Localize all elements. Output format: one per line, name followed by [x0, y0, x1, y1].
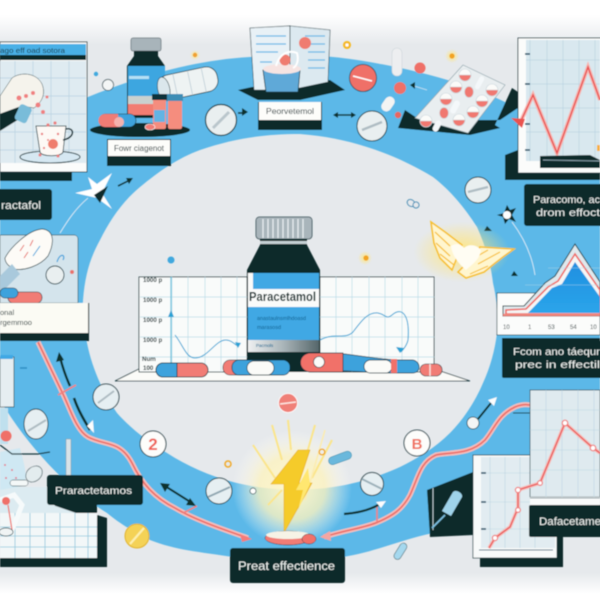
- label: paracomo drom effoct: drom effoct: [536, 207, 600, 219]
- icon: small tablet with arrow: [467, 397, 497, 429]
- pills falling: [16, 91, 48, 114]
- label: ional rgemmoo: onal: [0, 308, 15, 317]
- panel: central bottle display: [115, 217, 470, 381]
- panel: left blister thumbnail: [0, 229, 78, 303]
- tablet: [46, 266, 64, 284]
- icon: small rings and pills: [225, 449, 408, 561]
- label: fowr ciagenot: [107, 139, 171, 166]
- x-axis labels: 10: [590, 325, 597, 331]
- icon: winged heart: [414, 222, 514, 282]
- icon: pill bottle: [127, 38, 165, 118]
- arrow: left downward arrow: [74, 398, 94, 433]
- bottle small print: anastaulnsmlhdoasd: [257, 316, 306, 322]
- step badge: 2: [140, 431, 166, 457]
- label: fcom ano taequr: [502, 341, 600, 378]
- pour tube: [0, 264, 20, 290]
- icon: lightning burst: [232, 420, 352, 546]
- panel shadow: [0, 172, 72, 181]
- table top: [0, 487, 76, 513]
- step badge: B: B: [412, 436, 423, 453]
- panel: blister pack: [398, 65, 530, 135]
- panel background: [0, 235, 78, 303]
- shadow frame: [0, 505, 107, 567]
- chart: bottom-right stacked line charts: [473, 390, 600, 567]
- arrow: lower double arrow: [160, 483, 196, 506]
- red line: [520, 67, 600, 153]
- icon: main bottle: [247, 217, 320, 372]
- ground shadow: [90, 123, 190, 137]
- icon: coral base disc: [265, 531, 316, 545]
- icon: white spark with trail: [60, 173, 112, 233]
- label: preat effectience: Preat effectience: [238, 561, 335, 573]
- capsule: blue coral left: [156, 363, 208, 377]
- short dark dash: [513, 412, 530, 414]
- icon: tea cup with saucer: [20, 151, 80, 163]
- label: fcom ano taequr: prec in effectil: [515, 360, 600, 371]
- icon: right tablet: [465, 177, 491, 203]
- icon: main bottle: Pacmols: [256, 343, 274, 348]
- icon: tablets on left arc: [24, 384, 232, 548]
- arrow: spark to bottle: [118, 178, 133, 186]
- book pages: [250, 26, 290, 90]
- x-axis labels: 53: [548, 325, 555, 331]
- platform: [115, 369, 470, 381]
- icon: capsule: [98, 114, 136, 127]
- icon: coral top tablet: [278, 394, 298, 412]
- bowl: [263, 70, 300, 92]
- pole: [66, 439, 71, 479]
- shadow: [505, 150, 600, 180]
- y axis labels: 1000 p: [143, 297, 162, 304]
- rays: [253, 420, 332, 505]
- label: fowr ciagenot: Fowr ciagenot: [114, 144, 165, 153]
- grid table: [0, 513, 97, 558]
- chart: right mountain chart: [497, 244, 600, 346]
- y axis labels: 1000 p: [143, 317, 162, 324]
- label: praractetamos: Praractetamos: [55, 485, 132, 497]
- chart paper: [0, 42, 87, 172]
- icon: pen on dark card: [427, 472, 473, 537]
- shadow: [398, 88, 530, 135]
- panel: open book with bowl: [238, 26, 345, 100]
- icon: second tablet with double arrow: [333, 111, 387, 141]
- arrow: left upward arrow: [56, 352, 70, 386]
- label: ional rgemmoo: rgemmoo: [0, 318, 32, 327]
- label: ional rgemmoo: [0, 303, 89, 341]
- label: paracomo drom effoct: Paracomo, ac: [533, 194, 600, 206]
- x-axis labels: 10: [503, 325, 510, 331]
- shadow: [238, 80, 345, 100]
- mountain outline: [503, 244, 600, 316]
- y axis labels: 1000 p: [143, 337, 162, 344]
- front chart: [530, 390, 600, 505]
- bottle title: Paracetamol: [249, 289, 316, 304]
- panel header: [0, 44, 86, 55]
- red marker: [511, 118, 525, 128]
- chart: right small chart: [320, 277, 434, 372]
- icon: small gold dots: [94, 41, 459, 265]
- icon: pouring bottle: [0, 104, 24, 131]
- panel: top-left dose chart: ago eff oad sotora: [0, 46, 66, 55]
- label: peorvetemol: Peorvetemol: [266, 107, 314, 116]
- capsules: [8, 292, 42, 303]
- icon: small vials: [152, 94, 183, 129]
- label: peorvetemol: [258, 102, 322, 130]
- legs: [0, 495, 22, 535]
- blue curve: [320, 312, 408, 352]
- blue curve: [175, 335, 238, 358]
- label: paracomo drom effoct: [524, 184, 600, 226]
- label: dafacetame: Dafacetame: [539, 516, 600, 528]
- panel: top-left dose chart: [0, 42, 87, 181]
- capsule: large right: [300, 353, 419, 373]
- red line: [489, 423, 600, 548]
- label: fcom ano taequr: Fcom ano táequr: [513, 347, 600, 358]
- panel: medicine bottle group: [90, 38, 220, 137]
- label: ractafol: [0, 189, 52, 220]
- icon: bottom tablet with arrow: [344, 472, 386, 514]
- icon: pills and dots cluster: [379, 48, 427, 118]
- coral ball: [280, 54, 290, 66]
- small upper chart: [0, 357, 14, 407]
- flow line: right coral path: [320, 405, 534, 541]
- speckled figure: [0, 448, 26, 490]
- panel: lower left scene: [0, 355, 107, 567]
- bottle label: [248, 273, 319, 352]
- blister pills: [420, 69, 498, 127]
- label: praractetamos: [47, 475, 143, 505]
- mountain fill: [528, 262, 600, 313]
- label: dafacetame: [529, 505, 600, 537]
- icon: dark star with trail: [484, 205, 535, 276]
- chart: left small chart: [139, 277, 247, 372]
- book on chart base: [540, 155, 600, 168]
- x-axis labels: 1: [528, 325, 532, 331]
- chart: top-right zig-zag: [505, 38, 600, 180]
- x-axis labels: 54: [570, 325, 577, 331]
- label: preat effectience: [230, 548, 345, 583]
- icon: rolled cylinder: [155, 65, 220, 102]
- icon: hollow capsule link: [406, 198, 419, 208]
- white thumb shape: [5, 229, 52, 269]
- blister sheet: [415, 65, 505, 133]
- back chart: [473, 455, 563, 567]
- y axis labels: [142, 277, 162, 372]
- icon: main bottle: marasosd: [257, 325, 281, 331]
- icon: scattered top tablet: [102, 64, 376, 92]
- icon: tablet with arrow: [206, 104, 248, 136]
- label: ractafol: ractafol: [1, 200, 41, 212]
- x-axis labels: [503, 325, 597, 331]
- capsule: small coral: [420, 364, 442, 376]
- y axis labels: 100: [143, 365, 154, 372]
- flow line: left coral path: [38, 342, 252, 542]
- step badge: 2: 2: [148, 435, 158, 454]
- y-axis ticks: [525, 54, 530, 150]
- y axis labels: Num: [142, 356, 156, 363]
- bolt: [271, 450, 312, 533]
- capsule: middle: [223, 360, 290, 375]
- y axis labels: 1000 p: [143, 277, 162, 284]
- step badge: B: [404, 430, 430, 456]
- frame: [518, 38, 600, 173]
